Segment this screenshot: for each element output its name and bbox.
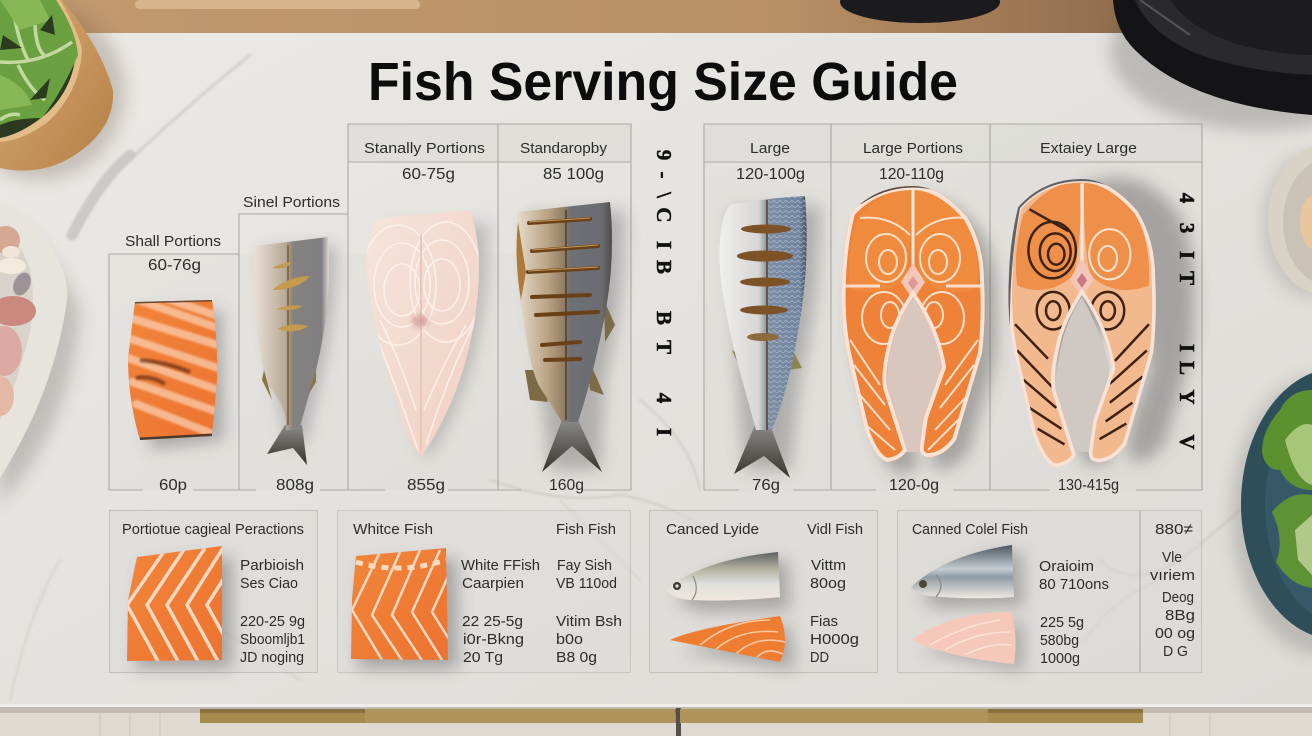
props: teal bowl with broccoli right — [1232, 368, 1312, 655]
panel text — [912, 521, 1195, 667]
panel text: 1000g — [1040, 650, 1080, 667]
gold cabinet handles — [200, 708, 1143, 736]
center vertical labels — [652, 150, 676, 436]
header: Standaropby: Standaropby — [520, 140, 607, 157]
weight: 85 100g: 85 100g — [543, 166, 604, 183]
props: black appliance top right — [1110, 0, 1312, 130]
center vertical labels: 4 — [652, 393, 676, 404]
table: large portions — [704, 124, 1202, 494]
right vertical labels: L — [1175, 361, 1199, 375]
panel: canned fish — [650, 510, 878, 672]
panel text: White FFish — [461, 557, 540, 574]
bottom weight: 76g: 76g — [752, 477, 780, 494]
props: small stone bowl right — [1262, 145, 1312, 297]
panel text: 8Bg — [1165, 607, 1195, 624]
center vertical labels: B — [652, 311, 676, 325]
icon: silver fish head — [911, 545, 1024, 608]
panel text — [122, 521, 305, 666]
title: Fish Serving Size Guide — [368, 52, 958, 112]
weight: 60-75g: 60-75g — [402, 166, 455, 183]
fish: grilled salmon steak — [1008, 178, 1194, 467]
fish: half fish with tail — [254, 237, 336, 465]
icon: salmon fillet 2 — [351, 548, 465, 668]
panel text: Canned Colel Fish — [912, 521, 1028, 538]
panel text: Vidl Fish — [807, 521, 863, 538]
right vertical labels: 4 — [1175, 193, 1199, 204]
panel text — [666, 521, 863, 666]
right vertical labels: Y — [1175, 389, 1199, 405]
panel text: Sboomljb1 — [240, 631, 305, 648]
center vertical labels: I — [652, 241, 676, 249]
panel text: 225 5g — [1040, 614, 1084, 631]
panel text: Caarpien — [462, 575, 524, 592]
center vertical labels: I — [652, 428, 676, 436]
fish: salmon steak — [840, 186, 997, 474]
bottom weight: 855g: 855g — [407, 477, 445, 494]
panel text: Oraioim — [1039, 558, 1094, 575]
bottom weight: 60p: 60p — [159, 477, 187, 494]
panel text — [353, 521, 622, 666]
right vertical labels: I — [1175, 251, 1199, 259]
right vertical labels: T — [1175, 271, 1199, 285]
center vertical labels: B — [652, 260, 676, 274]
center vertical labels: 9 — [652, 150, 676, 160]
props: plate with meat left — [0, 204, 80, 505]
center vertical labels: T — [652, 340, 676, 354]
fish: silver fish with scales — [719, 196, 820, 478]
panel text: Ses Ciao — [240, 575, 298, 592]
panel text: Canced Lyide — [666, 521, 759, 538]
bottom weight: 808g: 808g — [276, 477, 314, 494]
panel text: 20 Tg — [463, 649, 503, 666]
panel text: 580bg — [1040, 632, 1079, 649]
center vertical labels: - — [652, 172, 676, 178]
panel text: VB 110od — [556, 575, 617, 592]
weight: 60-76g: 60-76g — [148, 257, 201, 274]
panel text: 00 og — [1155, 625, 1195, 642]
header: Extaiey Large: Extaiey Large — [1040, 140, 1137, 157]
center vertical labels: C — [652, 207, 676, 223]
panel text: Vle — [1162, 549, 1182, 566]
panel text: B8 0g — [556, 649, 597, 666]
header: Large Portions: Large Portions — [863, 140, 963, 157]
weight: 120-100g: 120-100g — [736, 166, 805, 183]
panel text: i0r-Bkng — [463, 631, 524, 648]
bottom weight: 160g: 160g — [549, 477, 584, 494]
header: Shall Portions: Shall Portions — [125, 233, 221, 250]
panel text: vıriem — [1150, 567, 1195, 584]
fish: white fillet — [360, 210, 488, 462]
panel text: Vitim Bsh — [556, 613, 622, 630]
panel text: 80 710ons — [1039, 576, 1109, 593]
panel text: H000g — [810, 631, 859, 648]
fish: grilled salmon fillet small — [128, 298, 224, 450]
icon: salmon fillet 1 — [127, 545, 245, 668]
header: Sinel Portions: Sinel Portions — [243, 194, 340, 211]
panel text: Whitce Fish — [353, 521, 433, 538]
weight: 120-110g: 120-110g — [879, 166, 944, 183]
right vertical labels: V — [1175, 434, 1199, 450]
right vertical labels: 3 — [1175, 223, 1199, 233]
panel text: Parbioish — [240, 557, 304, 574]
fish: grilled whole fish — [515, 202, 625, 472]
center vertical labels: \ — [652, 191, 676, 199]
panel text: Deog — [1162, 589, 1194, 606]
panel text: b0o — [556, 631, 583, 648]
panel text: Vittm — [811, 557, 846, 574]
right vertical labels — [1175, 193, 1199, 450]
right vertical labels: I — [1175, 344, 1199, 352]
header: Large: Large — [750, 140, 790, 157]
icon: sardine — [666, 552, 790, 612]
panel text: 22 25-5g — [462, 613, 523, 630]
panel text: JD noging — [240, 649, 304, 666]
table: small and standard portions — [109, 124, 631, 494]
bottom weight: 120-0g: 120-0g — [889, 477, 939, 494]
panel: canned coley fish — [898, 510, 1202, 672]
icon: pink fillet — [911, 612, 1024, 672]
icon: salmon piece — [670, 616, 795, 670]
panel text: Fish Fish — [556, 521, 616, 538]
bottom weight: 130-415g: 130-415g — [1058, 477, 1119, 494]
panel text: 880≠ — [1155, 521, 1193, 538]
panel text: Fay Sish — [557, 557, 612, 574]
props: salad bowl top left — [0, 0, 125, 180]
panel text: D G — [1163, 643, 1188, 660]
panel: white fish — [338, 510, 630, 672]
panel text: 80og — [810, 575, 846, 592]
panel text: DD — [810, 649, 829, 666]
panel text: 220-25 9g — [240, 613, 305, 630]
panel text: Portiotue cagieal Peractions — [122, 521, 304, 538]
panel: portion fillet — [110, 510, 318, 672]
panel text: Fias — [810, 613, 838, 630]
header: Stanally Portions: Stanally Portions — [364, 140, 485, 157]
